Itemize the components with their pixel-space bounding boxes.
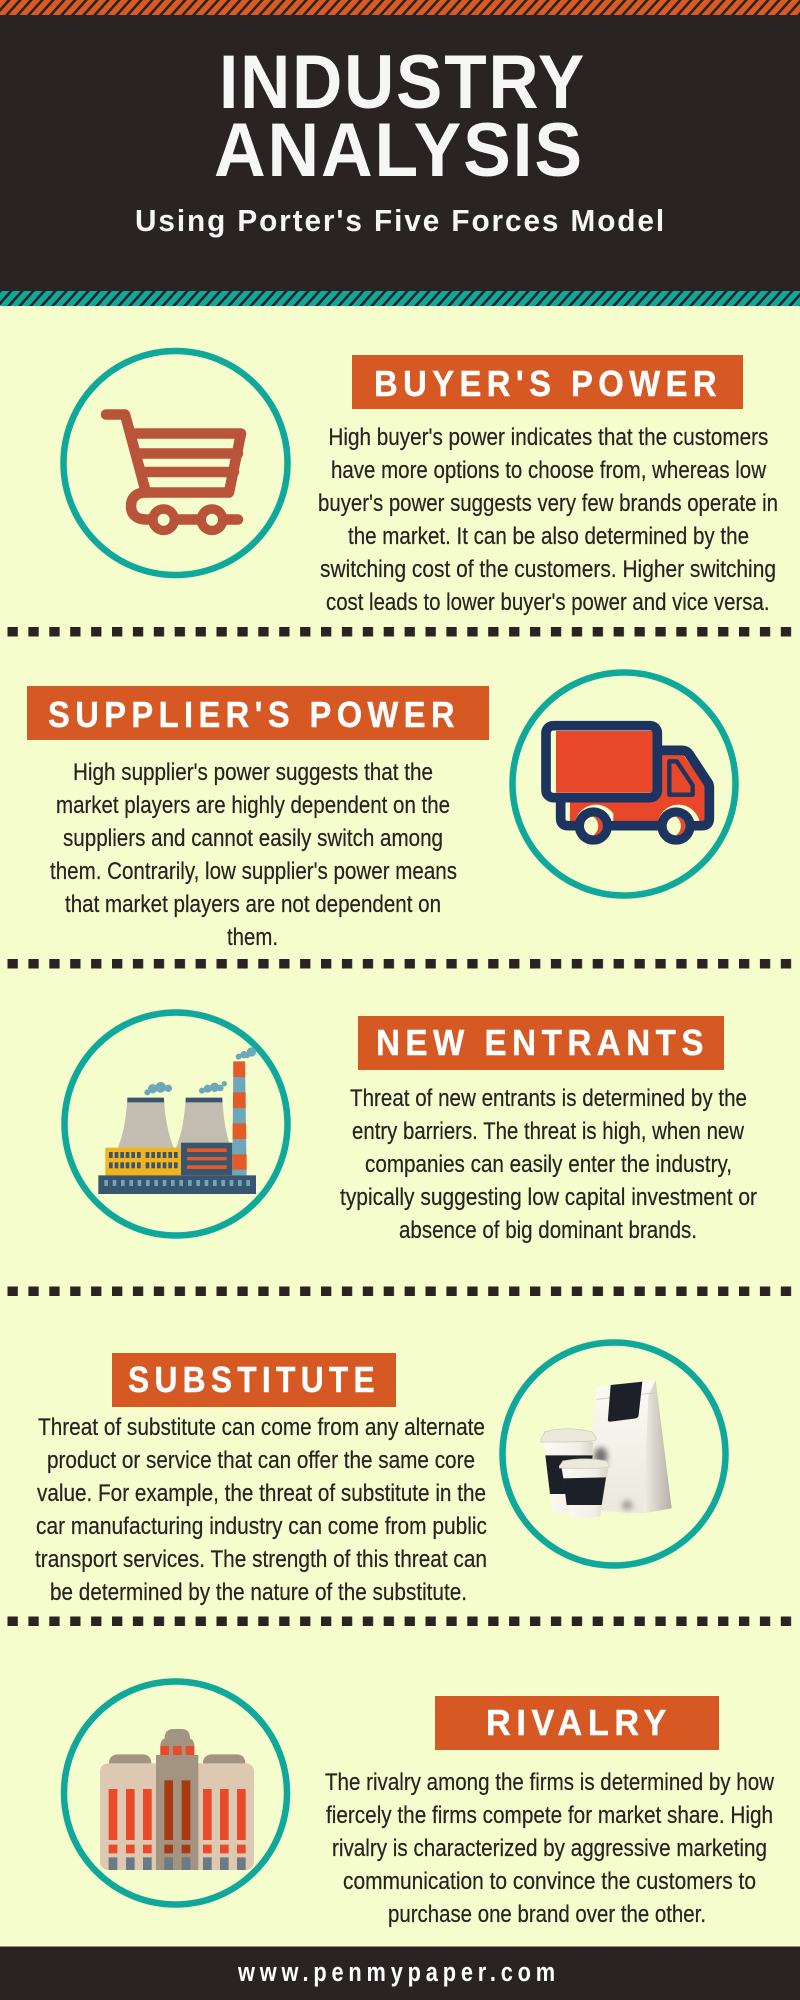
icon: coffee cups and paper bag in ring [502,1342,726,1566]
body text: companies can easily enter the industry, [365,1151,732,1178]
body text [50,759,457,951]
panel: substitute [35,1342,726,1606]
title: INDUSTRY [219,40,586,125]
heading [352,355,743,409]
body text: car manufacturing industry can come from public [36,1513,487,1540]
title [214,40,586,193]
icon: office building in ring [64,1682,287,1904]
body text: High supplier's power suggests that the [73,759,433,786]
body text [318,424,778,616]
body text [35,1414,487,1606]
panel: buyer's power [64,351,778,616]
body text: that market players are not dependent on [65,891,441,918]
heading: BUYER'S POWER [374,363,722,404]
body text: Threat of substitute can come from any alternate [38,1414,485,1441]
body text: value. For example, the threat of substitute in the [37,1480,486,1507]
footer [0,1946,800,2000]
title: ANALYSIS [214,108,584,193]
body text: suppliers and cannot easily switch among [63,825,443,852]
body text [340,1085,757,1244]
body text: them. [227,924,278,951]
body text: absence of big dominant brands. [399,1217,697,1244]
body text: transport services. The strength of this threat can [35,1546,487,1573]
body text: product or service that can offer the same core [47,1447,475,1474]
panel: rivalry [64,1682,775,1928]
website address: www.penmypaper.com [237,1957,560,1987]
body text [325,1769,775,1928]
panel: new entrants [64,1012,757,1244]
heading: SUPPLIER'S POWER [48,694,460,735]
icon: factory in ring [64,1012,288,1236]
body text: market players are highly dependent on the [56,792,450,819]
body text: purchase one brand over the other. [388,1901,706,1928]
heading: NEW ENTRANTS [376,1022,709,1063]
body text: be determined by the nature of the substitute. [50,1579,467,1606]
heading [435,1696,719,1750]
heading: SUBSTITUTE [128,1359,380,1400]
heading [112,1353,396,1407]
body text: them. Contrarily, low supplier's power means [50,858,457,885]
body text: Threat of new entrants is determined by the [350,1085,747,1112]
body text: entry barriers. The threat is high, when new [352,1118,745,1145]
heading: RIVALRY [486,1702,672,1743]
panel: supplier's power [27,672,736,951]
icon: delivery truck in ring [512,672,736,896]
subtitle: Using Porter's Five Forces Model [135,203,666,238]
header banner [0,0,800,306]
icon: shopping cart in ring [64,351,288,575]
